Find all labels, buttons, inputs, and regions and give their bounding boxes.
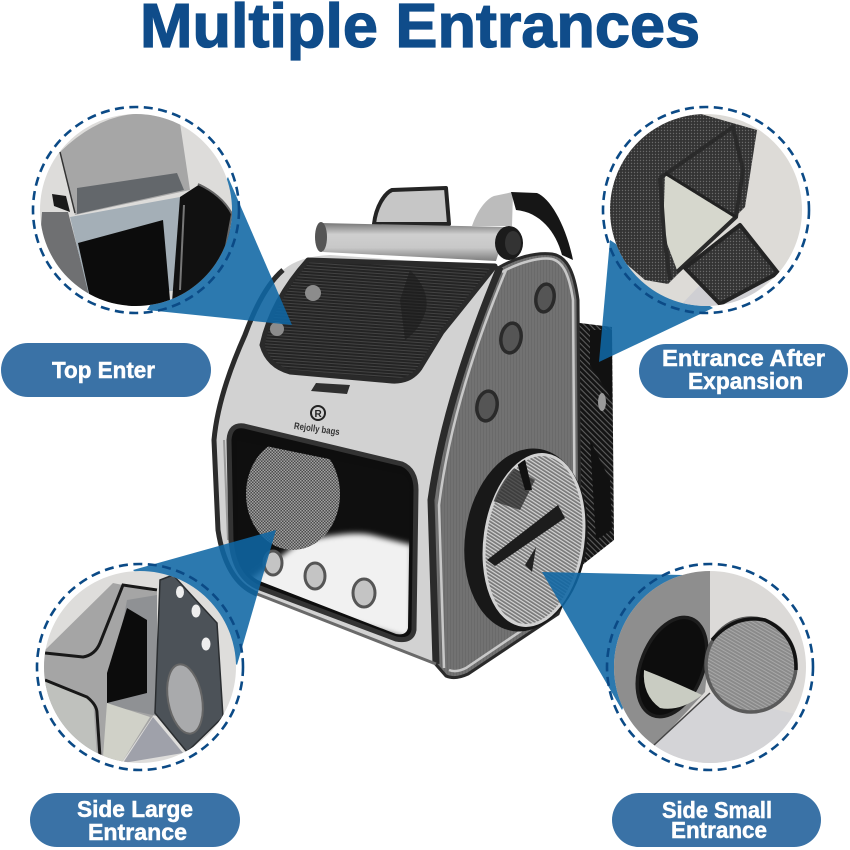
callout pointer: side large entrance	[133, 530, 276, 665]
label pill: top enter	[1, 343, 211, 397]
backpack product illustration	[214, 188, 614, 678]
round side entrance	[464, 448, 588, 632]
label pill: side large entrance	[30, 793, 240, 847]
label pill: side small entrance: Side Small	[662, 797, 772, 823]
label pill: side large entrance: Entrance	[88, 819, 187, 845]
label pill: side small entrance: Entrance	[671, 817, 767, 843]
callout pointer: top enter	[147, 177, 292, 325]
label pill: entrance after expansion: Expansion	[688, 368, 803, 394]
callout pointer: entrance after expansion	[599, 240, 713, 362]
detail circle: top enter	[33, 107, 239, 313]
left shoulder strap	[374, 188, 449, 224]
label pill: entrance after expansion	[639, 344, 848, 398]
brand logo: Rejolly bags	[293, 421, 340, 438]
window ventilation grommets	[264, 551, 375, 607]
brand logo	[293, 406, 340, 438]
front panel zipper edges	[214, 267, 506, 668]
brand logo: R	[314, 409, 322, 420]
callout pointer: side small entrance	[542, 572, 683, 710]
top mesh flap	[262, 260, 495, 381]
flap tab	[311, 383, 350, 394]
detail circle: side small entrance	[600, 564, 813, 770]
label pill: top enter: Top Enter	[52, 357, 155, 383]
label pill: side large entrance: Side Large	[77, 796, 193, 822]
side air holes	[475, 283, 556, 423]
top carry roll	[315, 222, 523, 261]
detail circle: entrance after expansion	[603, 107, 809, 313]
right shoulder strap	[472, 192, 573, 260]
detail circle: side large entrance	[37, 564, 243, 770]
label pill: entrance after expansion: Entrance After	[662, 345, 825, 371]
carrier front panel	[214, 255, 500, 664]
carrier side panel	[428, 254, 580, 678]
back mesh pocket	[572, 322, 614, 570]
large front window	[229, 420, 420, 645]
label pill: side small entrance	[612, 793, 821, 847]
